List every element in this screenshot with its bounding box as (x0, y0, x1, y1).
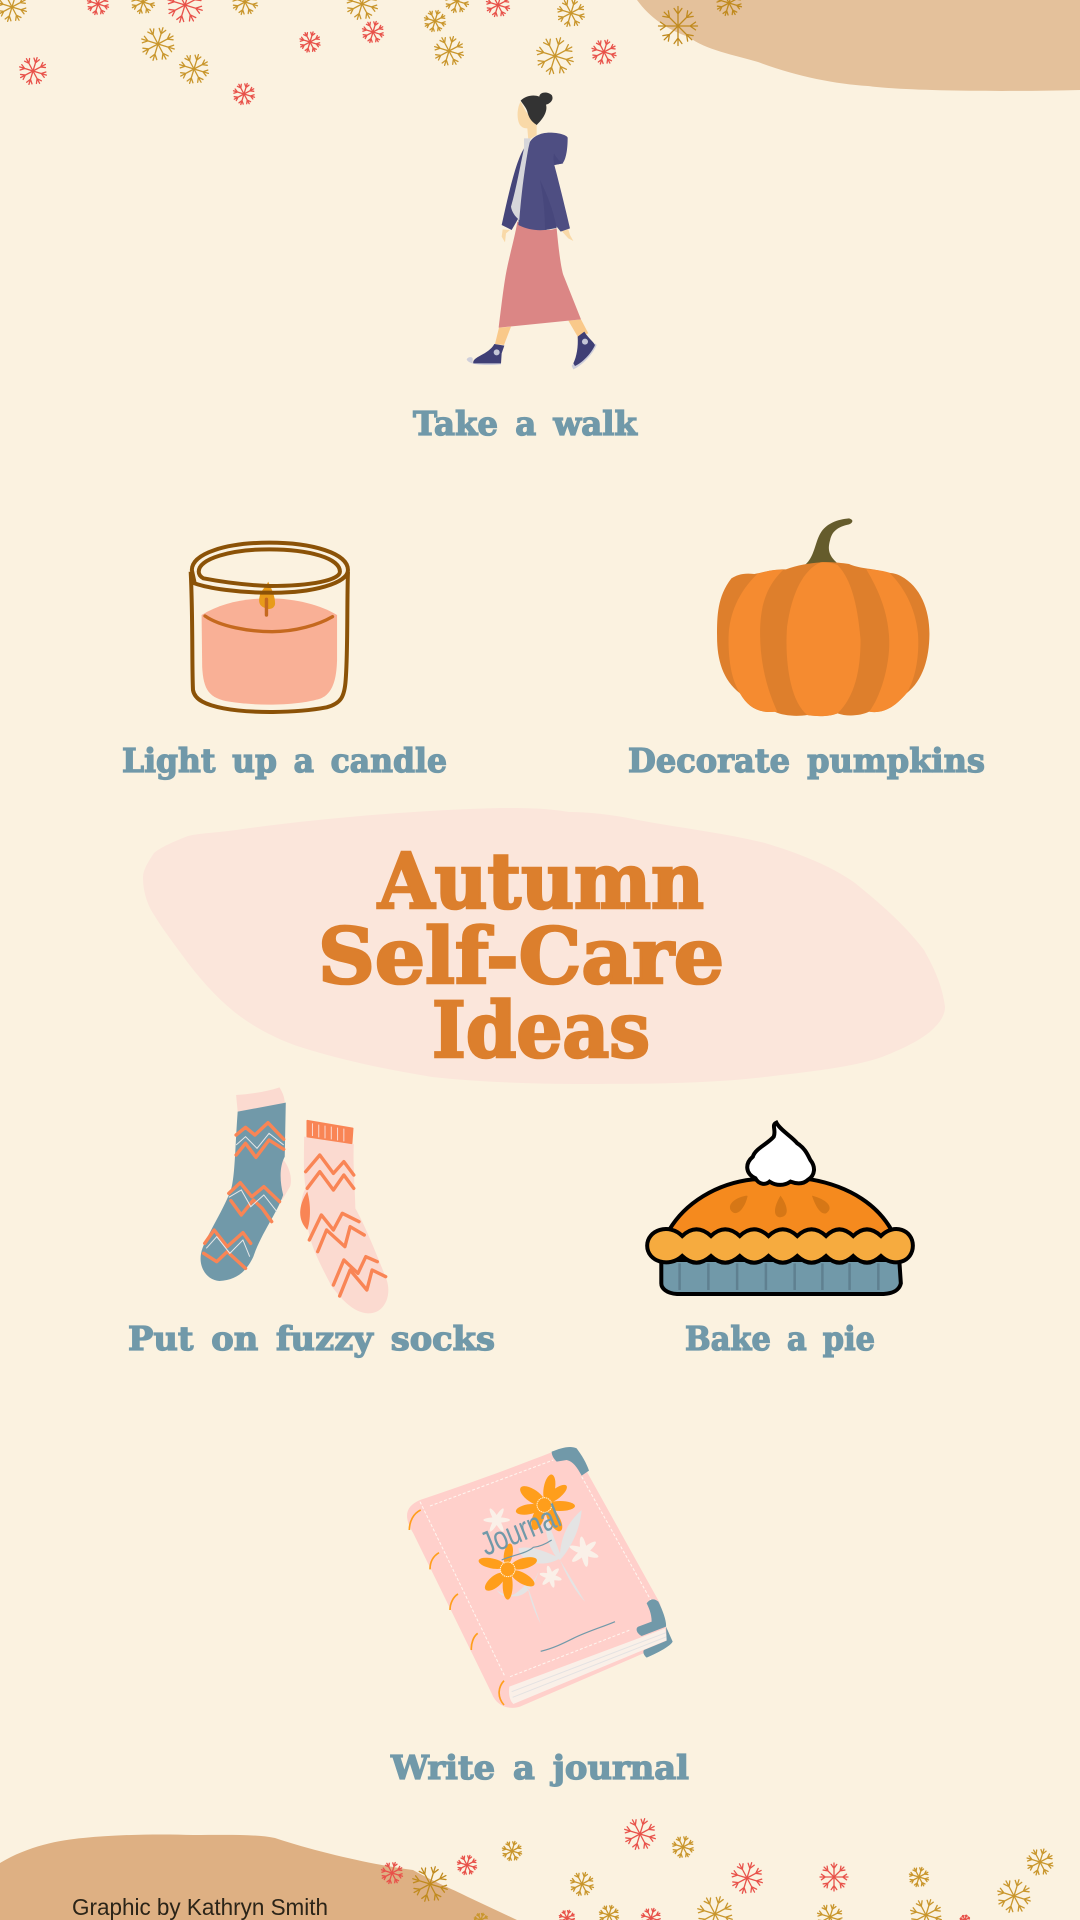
blob: bottom left (0, 1834, 517, 1920)
label: write a journal: Write a journal (390, 1748, 689, 1787)
credit: Graphic by Kathryn Smith (72, 1894, 328, 1920)
title: Ideas (432, 986, 650, 1076)
label: put on fuzzy socks: Put on fuzzy socks (128, 1319, 495, 1358)
title: Self-Care (318, 912, 724, 1002)
label: light up a candle: Light up a candle (122, 741, 447, 780)
title: Autumn (377, 837, 704, 927)
snowflakes: top cluster (0, 0, 742, 105)
label: decorate pumpkins: Decorate pumpkins (628, 741, 985, 780)
icon: journal (407, 1447, 673, 1708)
icon: socks (201, 1087, 388, 1313)
label: take a walk: Take a walk (413, 404, 638, 443)
icon: journal: Journal (475, 1498, 566, 1563)
snowflakes: bottom cluster (381, 1818, 1054, 1920)
icon: pumpkin (717, 518, 929, 716)
title (318, 837, 724, 1076)
icon: candle (191, 543, 348, 712)
icon: pie (647, 1123, 913, 1294)
blob: top right (637, 0, 1080, 91)
panel: title blob (143, 808, 945, 1084)
icon: woman walking (467, 93, 597, 369)
label: bake a pie: Bake a pie (685, 1319, 875, 1358)
